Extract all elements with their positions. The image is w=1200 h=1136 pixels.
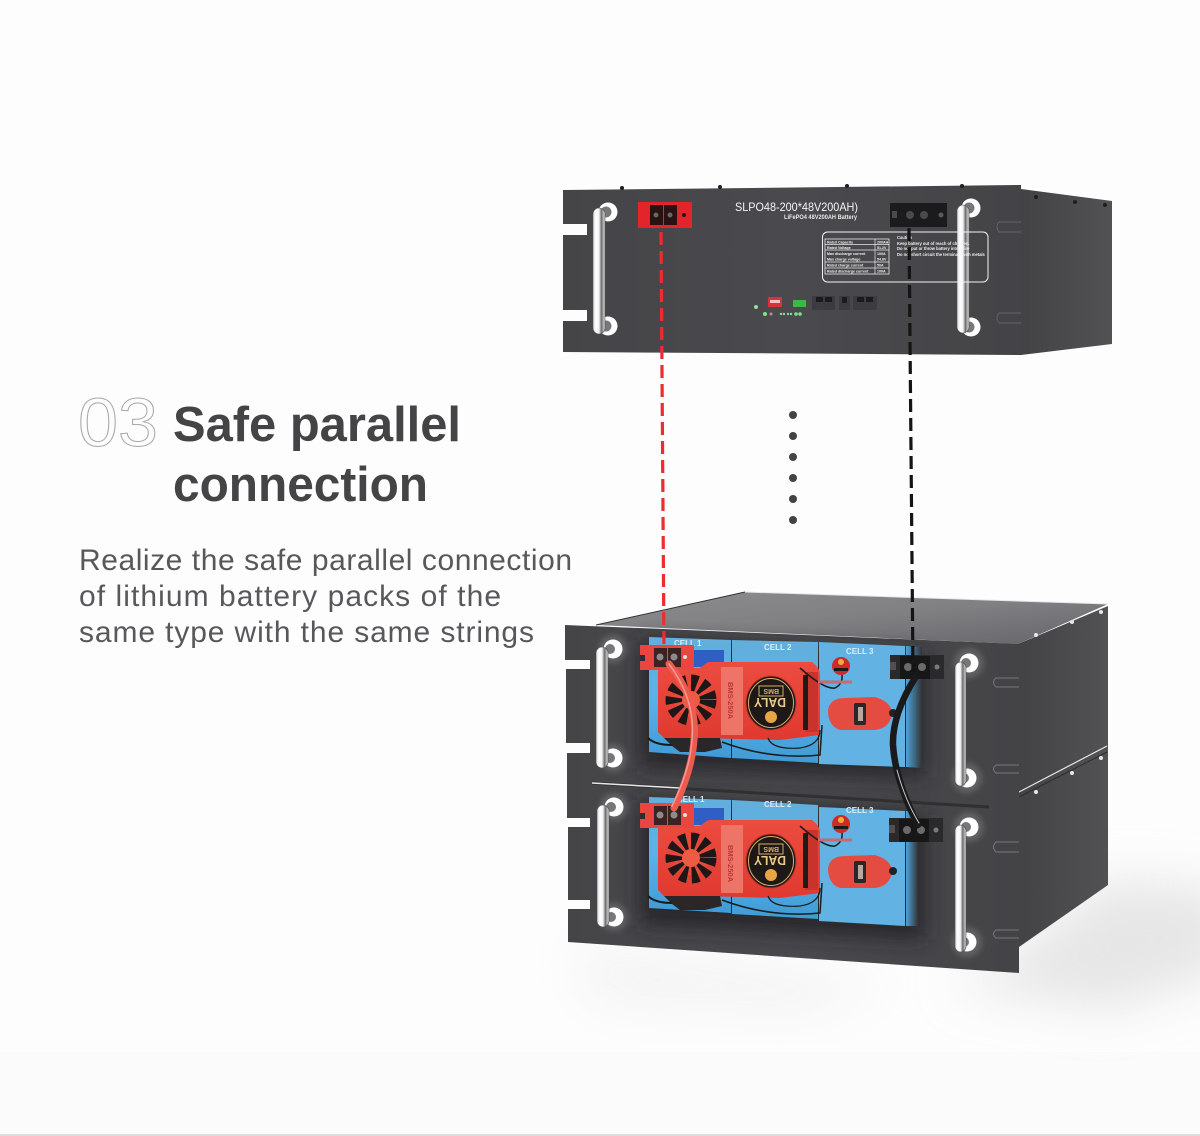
spec label: Max discharge current bbox=[827, 252, 866, 256]
top battery unit bbox=[563, 184, 1112, 355]
lower cells: CELL 3 bbox=[846, 806, 874, 815]
upper cells: CELL 1 bbox=[674, 639, 702, 648]
description: same type with the same strings bbox=[79, 616, 534, 649]
rack divider bbox=[592, 783, 989, 807]
upper BMS module bbox=[640, 645, 897, 756]
left handle bbox=[593, 208, 605, 334]
spec label: 50A bbox=[877, 264, 884, 268]
floor shadows bbox=[575, 880, 1200, 1015]
upper black terminal bbox=[890, 655, 944, 679]
upper cells bbox=[649, 637, 922, 768]
heading: connection bbox=[173, 458, 428, 512]
black link cable bbox=[893, 678, 919, 825]
ear notches bbox=[994, 678, 1019, 938]
side panel bbox=[1018, 606, 1108, 947]
spec label: Rated charge current bbox=[827, 264, 864, 268]
lower BMS module: DALY bbox=[754, 853, 786, 868]
lower BMS module: BMS-250A bbox=[726, 845, 735, 883]
mounting holes bbox=[604, 640, 978, 952]
spec label: Caution bbox=[897, 235, 913, 240]
handles bbox=[596, 647, 966, 952]
lower BMS module: BMS bbox=[763, 845, 779, 852]
lower BMS module bbox=[640, 803, 897, 914]
heading bbox=[173, 398, 461, 512]
mounting holes bbox=[598, 198, 980, 336]
spec label: Rated Voltage bbox=[827, 246, 851, 250]
black dashed connector bbox=[909, 228, 913, 672]
spec label: 100A bbox=[877, 270, 886, 274]
side panel bbox=[1021, 189, 1112, 355]
spec label: 100A bbox=[877, 252, 886, 256]
spec label: Rated discharge current bbox=[827, 270, 869, 274]
spec label bbox=[822, 232, 988, 282]
indicator panel bbox=[754, 296, 877, 316]
red dashed connector bbox=[661, 232, 664, 650]
spec label: Rated Capacity bbox=[827, 240, 853, 244]
description: of lithium battery packs of the bbox=[79, 580, 501, 613]
number 03: 03 bbox=[78, 384, 158, 461]
front panel bbox=[563, 185, 1022, 355]
model text: SLPO48-200*48V200AH) bbox=[735, 200, 858, 214]
spec label: Do not put or throw battery into a fire bbox=[897, 246, 970, 251]
upper BMS module: DALY bbox=[754, 695, 786, 710]
front panel bbox=[565, 625, 1019, 973]
ellipsis dots bbox=[789, 411, 797, 524]
black terminal bbox=[890, 203, 947, 227]
lower battery rack bbox=[565, 592, 1108, 973]
spec label: Do not short circuit the terminals with metals bbox=[897, 252, 986, 257]
upper BMS module: BMS bbox=[763, 687, 779, 694]
spec label: 54.8V bbox=[877, 258, 887, 262]
description bbox=[79, 544, 572, 649]
lid bbox=[596, 592, 1108, 644]
lower black terminal bbox=[889, 818, 943, 842]
hole highlights bbox=[599, 635, 984, 957]
battery subtitle: LiFePO4 48V200AH Battery bbox=[784, 214, 857, 221]
red link cable bbox=[669, 664, 694, 808]
heading: Safe parallel bbox=[173, 398, 461, 452]
lower cells: CELL 2 bbox=[764, 800, 792, 809]
lower cells: CELL 1 bbox=[677, 795, 705, 804]
lower cells bbox=[649, 795, 918, 926]
spec label: Keep battery out of reach of children. bbox=[897, 241, 970, 246]
recessed window shadows bbox=[640, 640, 925, 940]
right handle bbox=[957, 205, 969, 333]
spec label: 51.2V bbox=[877, 246, 887, 250]
red terminal bbox=[638, 202, 692, 228]
upper cells: CELL 2 bbox=[764, 643, 792, 652]
ear notches bbox=[997, 222, 1021, 323]
spec label: Max charge voltage bbox=[827, 258, 860, 262]
floor background band bbox=[0, 1052, 1200, 1136]
bottom edge strip bbox=[0, 1134, 1200, 1136]
upper BMS module: BMS-250A bbox=[726, 682, 735, 720]
upper cells: CELL 3 bbox=[846, 647, 874, 656]
description: Realize the safe parallel connection bbox=[79, 544, 572, 577]
side screws bbox=[620, 184, 1107, 207]
spec label: 200AH bbox=[877, 240, 889, 244]
